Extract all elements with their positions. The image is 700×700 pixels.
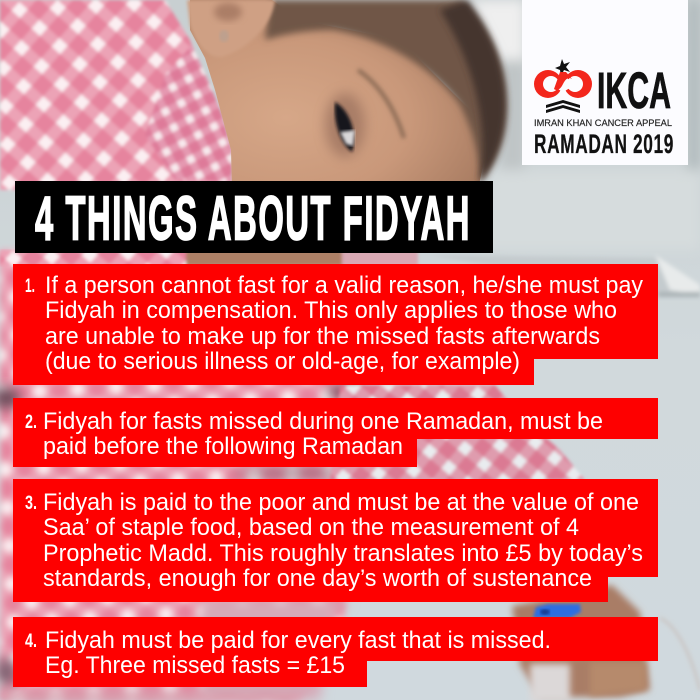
strip beneath title (0, 250, 418, 266)
dark shadows at left edge and folds (0, 386, 370, 686)
title banner (15, 181, 493, 254)
panel: point 3: 3. (25, 493, 37, 514)
panel: point 4: Fidyah must be paid for every fast that is missed. (45, 628, 551, 654)
panel: point 1: If a person cannot fast for a valid reason, he/she must pay (45, 273, 643, 299)
eye socket shadow (325, 93, 365, 157)
soft fade of clothing into bed at bottom (0, 600, 350, 700)
lower left blurred clothing (0, 250, 345, 700)
panel: point 2: Fidyah for fasts missed during one Ramadan, must be (43, 409, 603, 435)
eye (335, 102, 354, 152)
face (187, 0, 506, 190)
panel: point 1: are unable to make up for the missed fasts afterwards (45, 324, 600, 350)
lower gingham fold (330, 385, 585, 482)
pillow folds (470, 0, 700, 250)
panel: point 1: (due to serious illness or old-age, for example) (45, 349, 520, 375)
panel: point 3: Saa’ of staple food, based on the measurement of 4 (43, 515, 579, 541)
panel: point 1 (13, 264, 658, 385)
panel: point 4 (13, 617, 658, 687)
panel: point 2: 2. (25, 412, 37, 433)
hair (265, 0, 506, 185)
icon: star and crescent emblem (534, 59, 592, 113)
ear (187, 0, 275, 57)
panel: point 3 (13, 479, 658, 602)
panel: point 3: Fidyah is paid to the poor and must be at the value of one (43, 490, 639, 516)
panel: point 3: Prophetic Madd. This roughly translates into £5 by today’s (43, 541, 643, 567)
upper gingham clothing (0, 0, 232, 190)
panel: point 1: 1. (25, 276, 35, 297)
panel: point 4: Eg. Three missed fasts = £15 (45, 653, 345, 679)
panel: point 2: paid before the following Ramadan (43, 434, 403, 460)
logo subtitle: IMRAN KHAN CANCER APPEAL (534, 117, 672, 128)
panel: point 3: standards, enough for one day’s worth of sustenance (43, 566, 592, 592)
logo panel (522, 0, 688, 165)
brow (358, 70, 404, 138)
panel: point 1: Fidyah in compensation. This only applies to those who (45, 298, 617, 324)
panel: point 4: 4. (25, 631, 37, 652)
hand with cannula (512, 585, 700, 700)
panel: point 2 (13, 398, 658, 467)
